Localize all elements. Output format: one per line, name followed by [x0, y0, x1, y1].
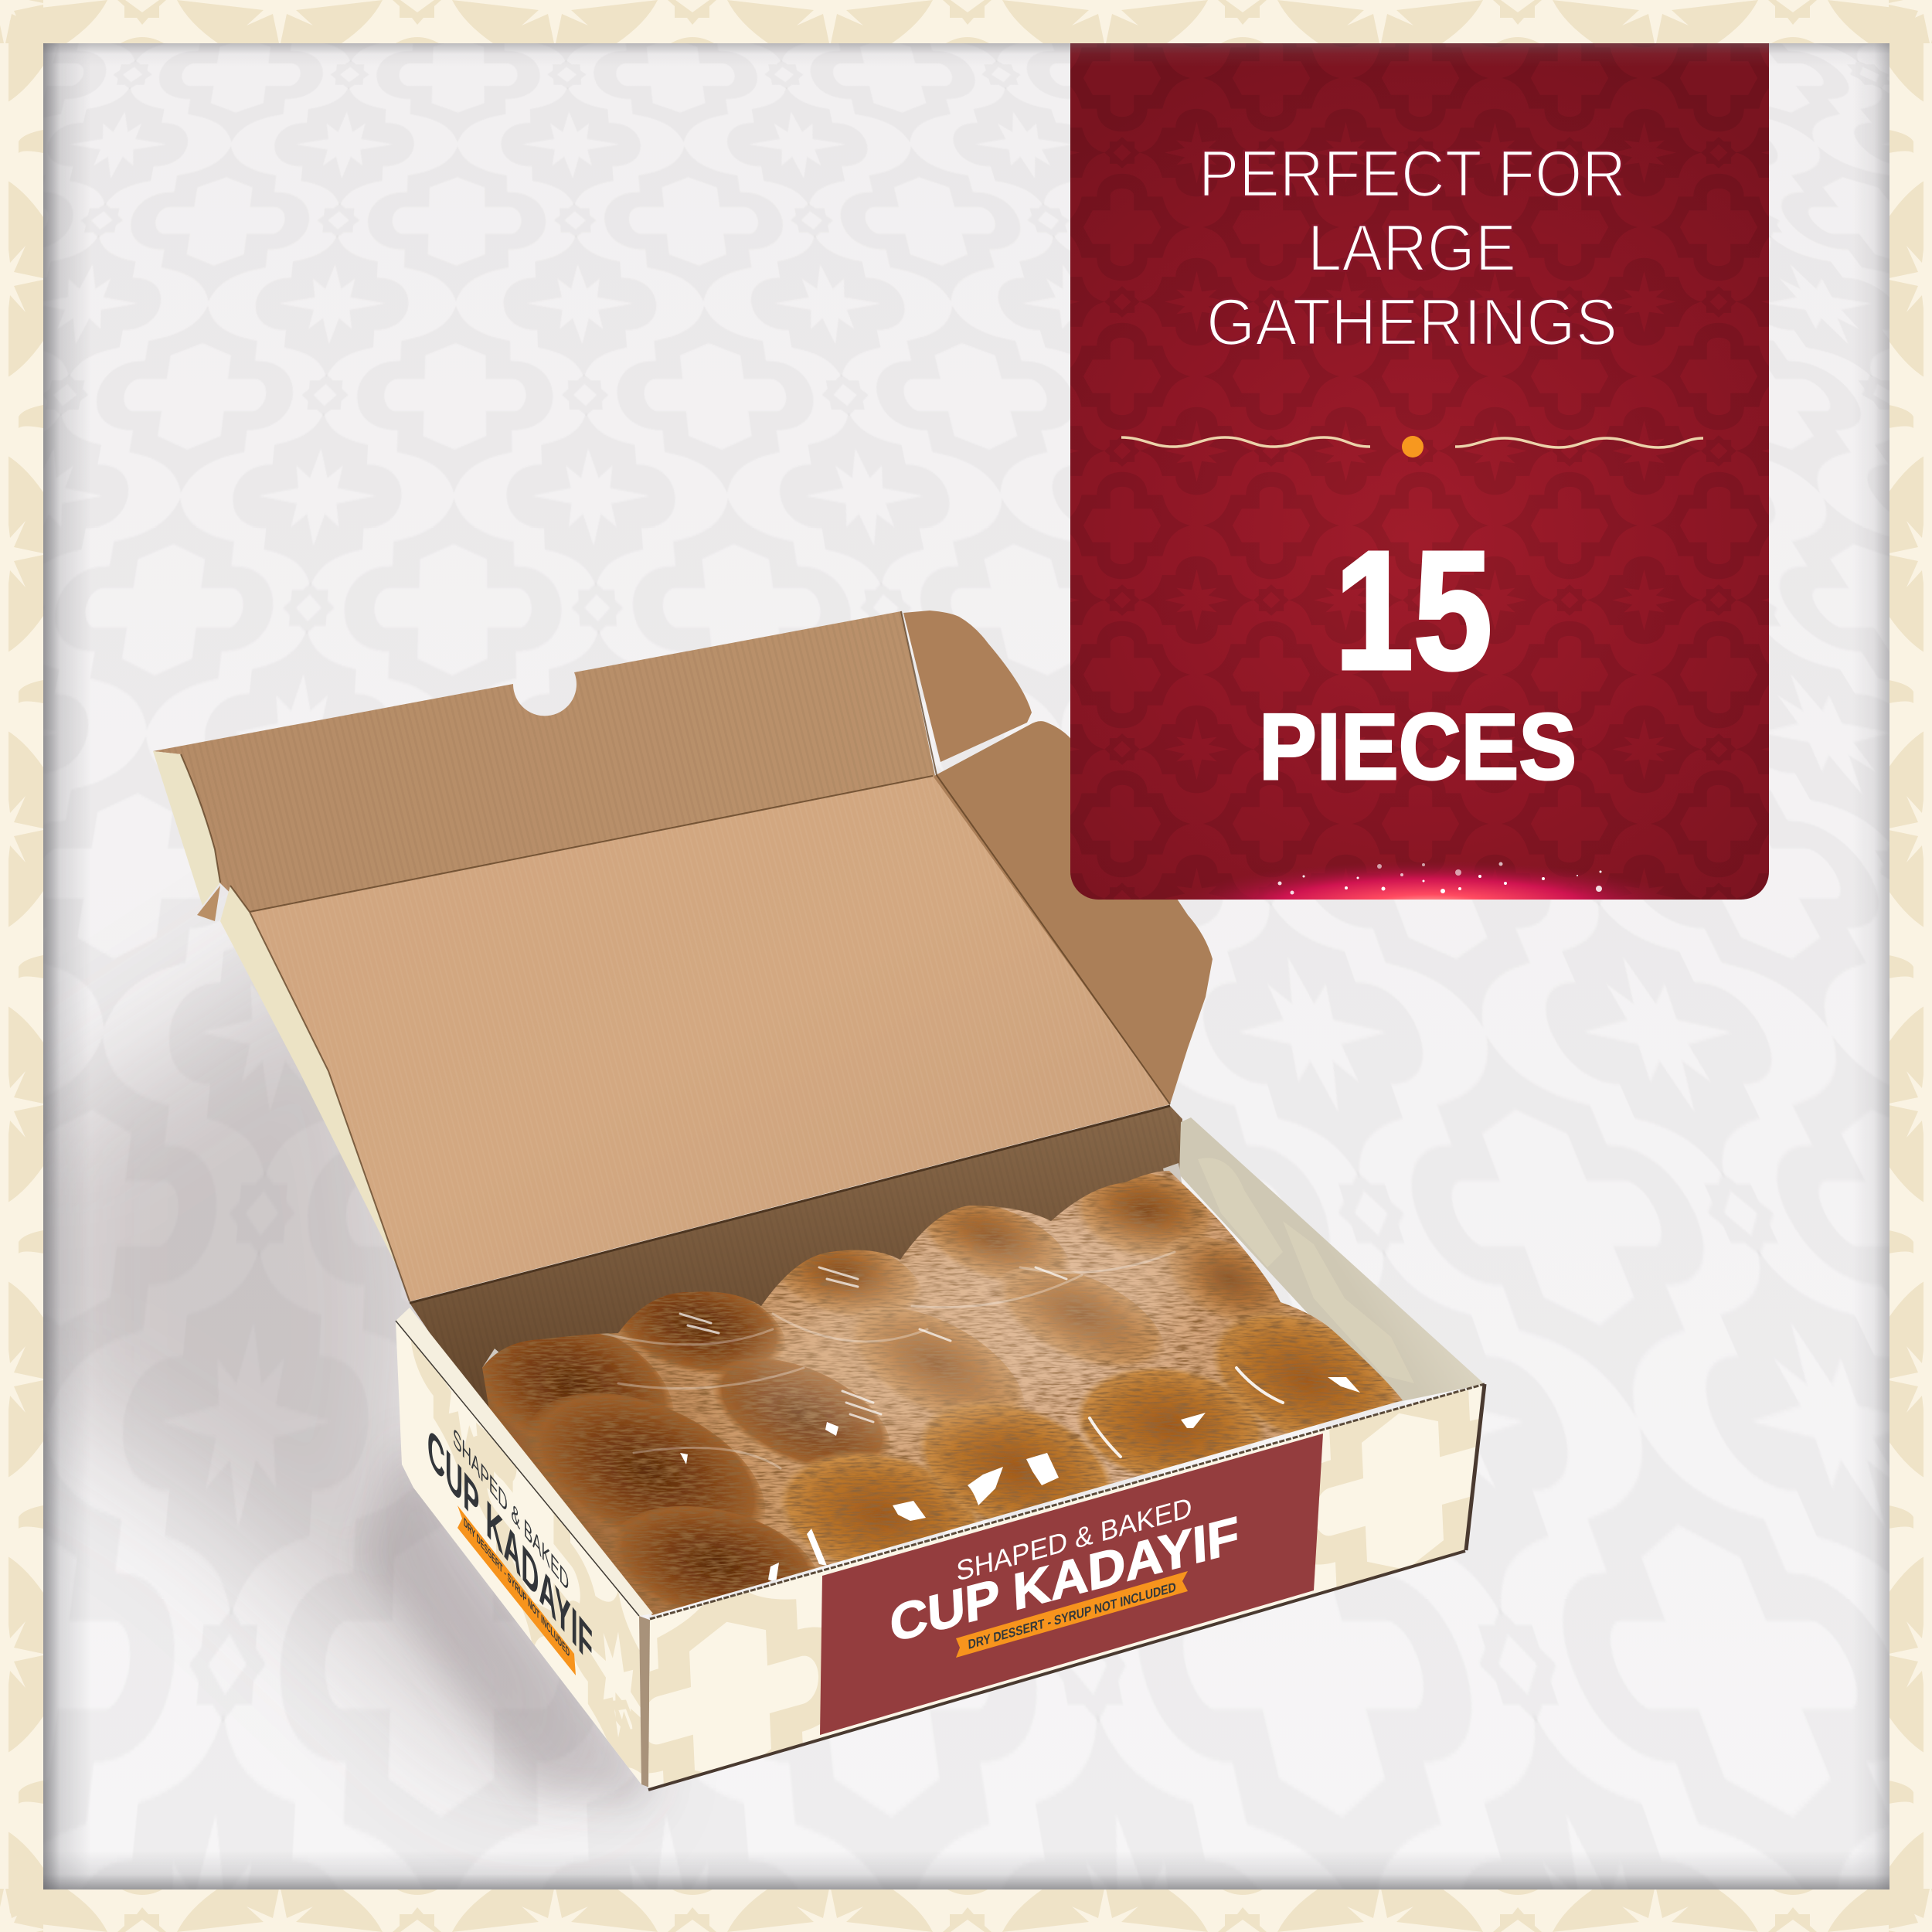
heading: perfect for large gatherings: PERFECT FOR [1199, 138, 1626, 211]
glow with sparkles [1175, 861, 1685, 951]
left wall ribbon [457, 1505, 576, 1675]
heading: perfect for large gatherings [1199, 138, 1626, 359]
divider: wavy lines and orange dot [1121, 436, 1703, 457]
front text: shaped and baked: SHAPED & BAKED [955, 1492, 1192, 1587]
corrugated front corner edge [639, 1616, 651, 1788]
front text: cup kadayif: CUP KADAYIF [889, 1506, 1240, 1654]
lid inner large panel [250, 776, 1170, 1301]
kadayif pastries wrapped in plastic [482, 1163, 1403, 1615]
front ribbon [956, 1571, 1188, 1658]
panel: perfect for large gatherings [1070, 43, 1769, 951]
floor shadows around box [31, 912, 653, 1804]
left wall of box with inner rim: CUP KADAYIF [427, 1414, 593, 1679]
cream outer edge of lid [153, 751, 220, 906]
plastic wrap corner [482, 1349, 510, 1391]
front ribbon text: DRY DESSERT - SYRUP NOT INCLUDED [968, 1579, 1176, 1652]
front wall of box [648, 1383, 1487, 1791]
number: 15: 15 [1335, 517, 1492, 705]
heading: perfect for large gatherings: LARGE [1308, 212, 1516, 285]
white glare highlights [680, 1377, 1360, 1583]
left wall of box with inner rim: DRY DESSERT - SYRUP NOT INCLUDED [464, 1515, 570, 1661]
left wall pattern [411, 1340, 641, 1773]
red label panel on front wall [820, 1434, 1323, 1735]
left wall of box with inner rim [396, 1308, 653, 1784]
heading: perfect for large gatherings: GATHERINGS [1206, 286, 1617, 359]
pastry pieces [482, 1171, 1403, 1615]
lid right side flap [933, 721, 1213, 1104]
label: pieces: PIECES [1259, 694, 1577, 799]
panel background [1070, 43, 1769, 900]
front wall pattern [602, 1320, 1531, 1872]
plastic haze and glare [600, 1206, 1284, 1470]
inside back wall of box [410, 1106, 1182, 1430]
open lid of cardboard box [153, 611, 1213, 1301]
small folded tan corner [197, 886, 220, 921]
inside right wall of box [1179, 1117, 1485, 1403]
lid top flap with thumb notch [153, 611, 935, 912]
lid tab, top right [903, 611, 1032, 762]
left wall text: shaped and baked: SHAPED & BAKED [453, 1422, 569, 1598]
